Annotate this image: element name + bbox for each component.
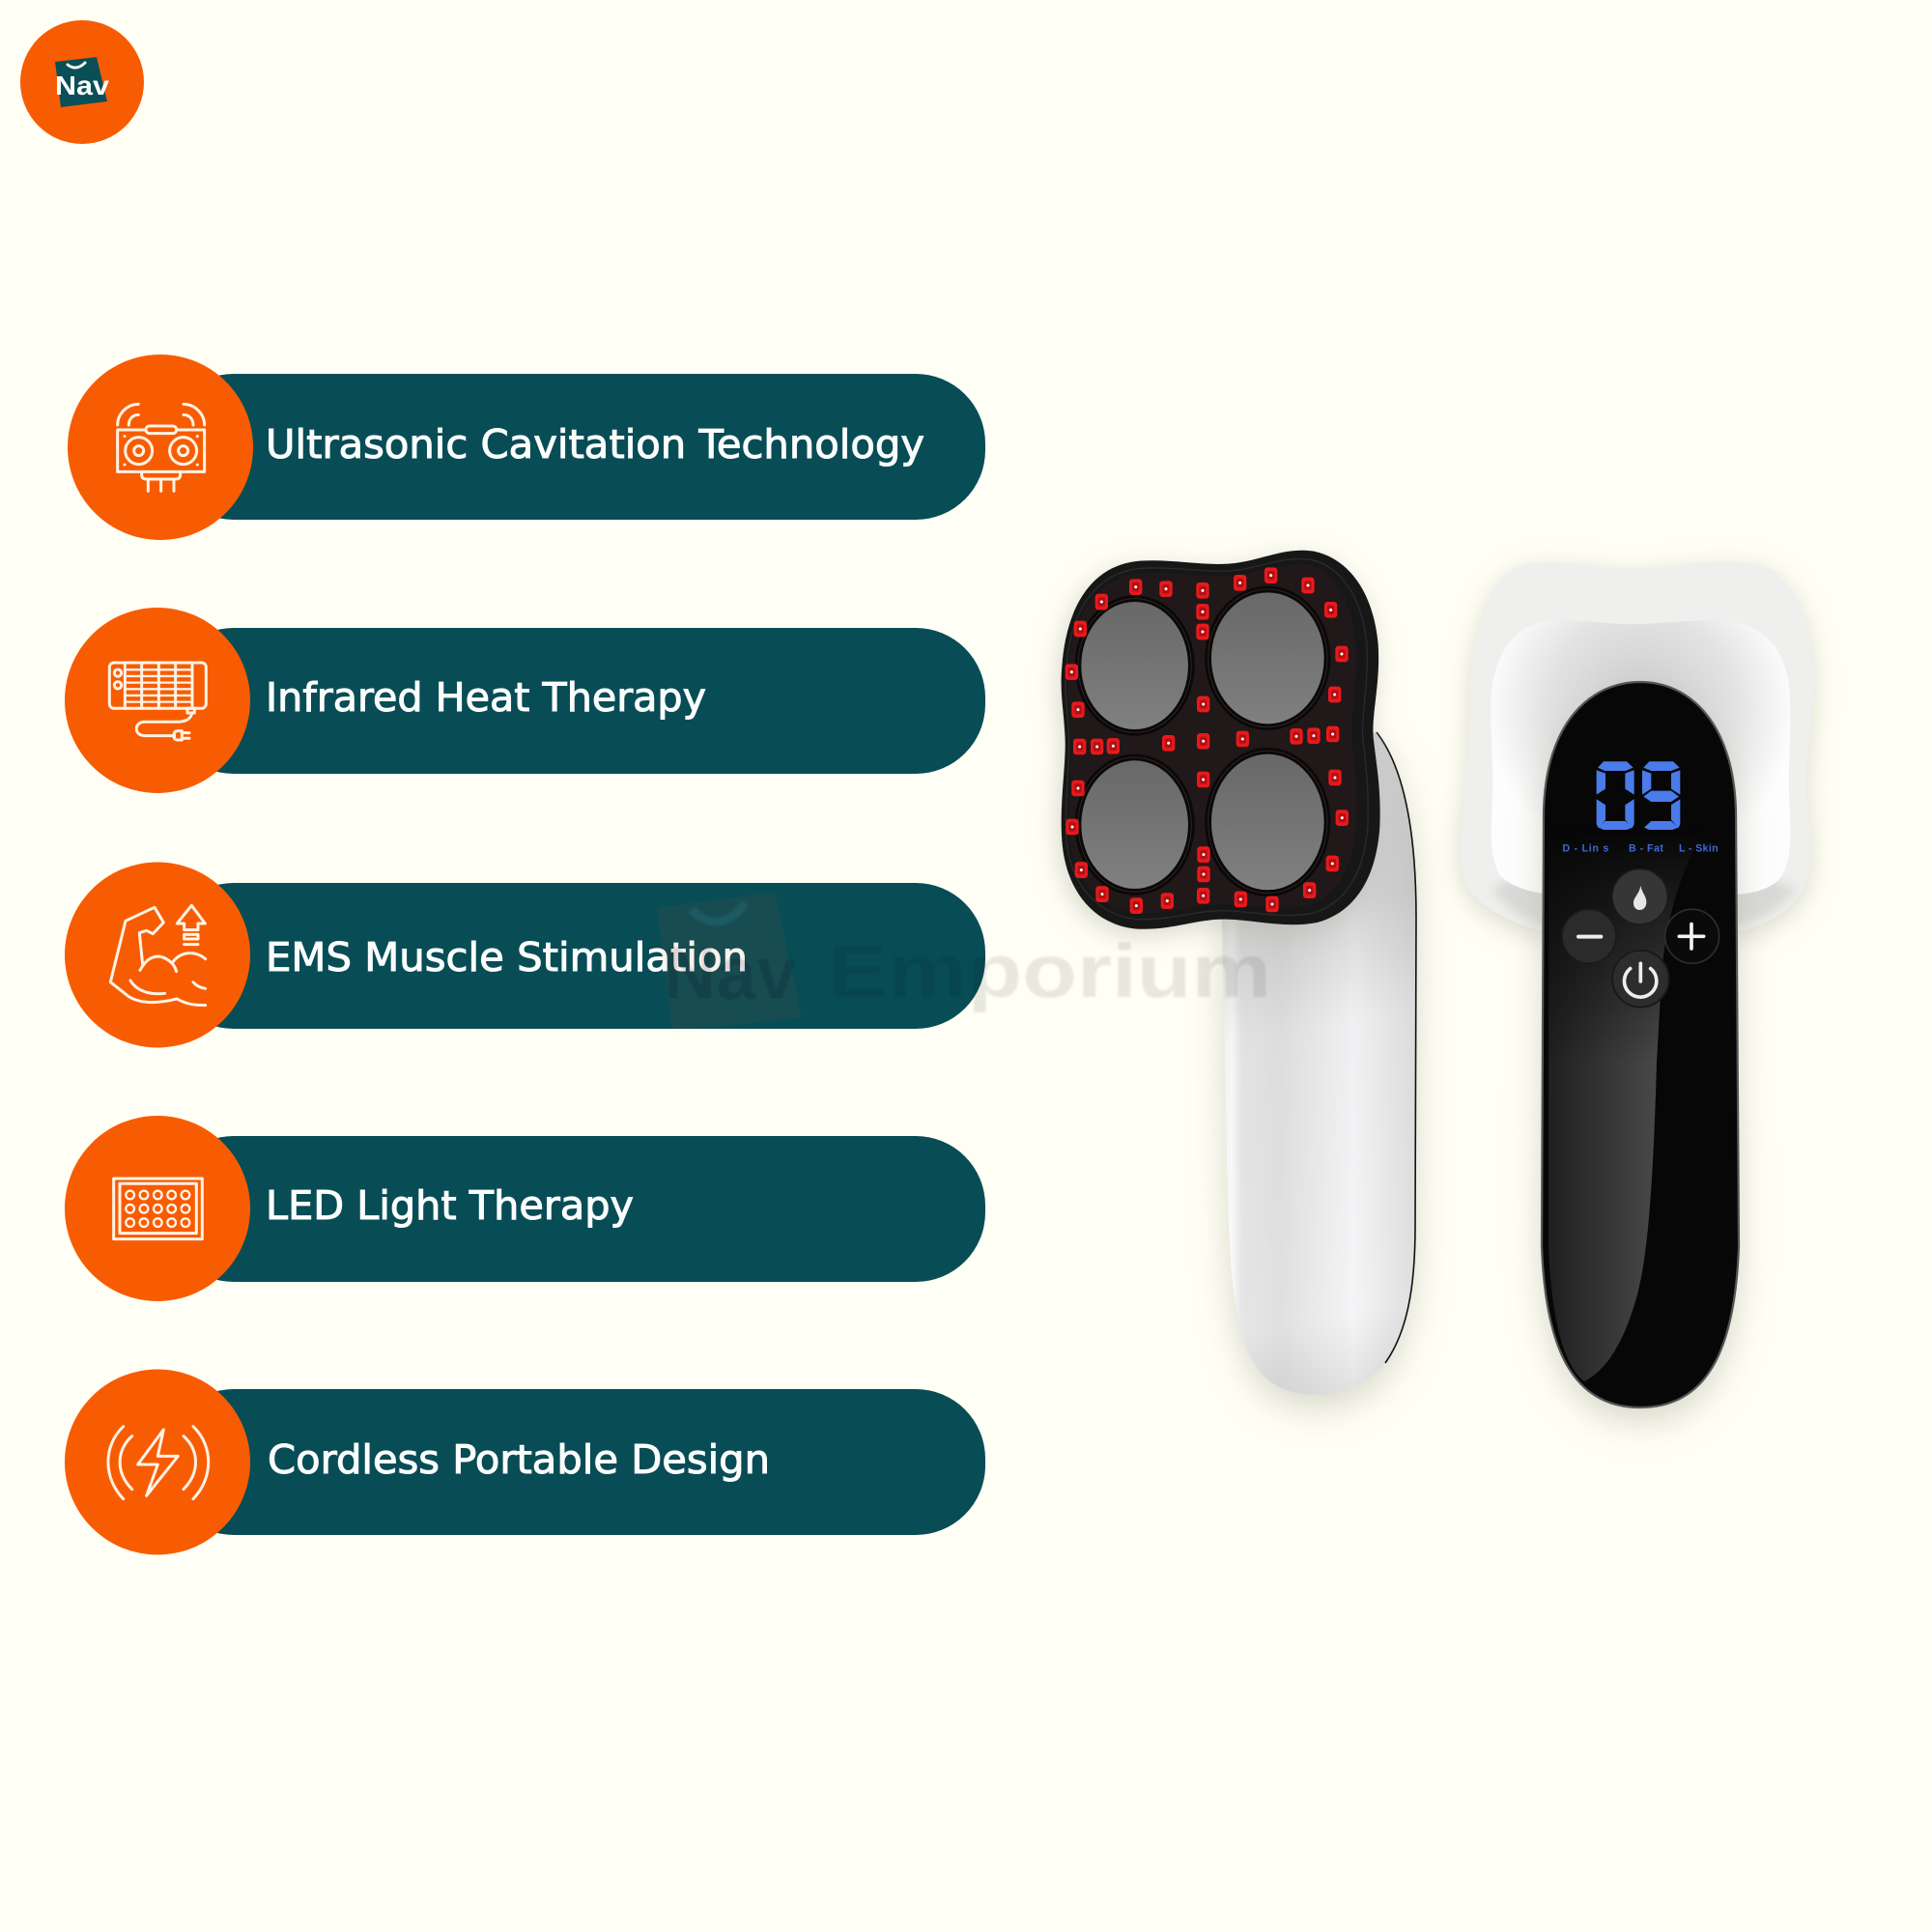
button: minus bbox=[1562, 909, 1616, 963]
icon: flexed arm with arrow bbox=[110, 905, 206, 1006]
display mode labels: D - Lin s bbox=[1562, 843, 1608, 855]
label: EMS Muscle Stimulation bbox=[266, 934, 748, 980]
label: Ultrasonic Cavitation Technology bbox=[266, 421, 924, 468]
display mode labels: L - Skin bbox=[1679, 843, 1719, 855]
button: power bbox=[1612, 951, 1669, 1008]
display mode labels: B - Fat bbox=[1629, 843, 1663, 855]
feature row: EMS muscle bbox=[65, 862, 985, 1047]
feature row: cordless bbox=[65, 1370, 985, 1555]
feature row: infrared heat bbox=[65, 608, 985, 793]
button: plus bbox=[1665, 909, 1719, 963]
handle: black glossy bbox=[1542, 682, 1739, 1421]
logo badge: Nav bbox=[55, 71, 109, 100]
watermark: Nav bbox=[664, 930, 798, 1015]
lens: bottom right bbox=[1205, 748, 1330, 896]
handle: white bbox=[1222, 732, 1416, 1408]
logo badge bbox=[20, 20, 144, 144]
lens: top left bbox=[1075, 595, 1195, 736]
display: 09 bbox=[1597, 761, 1680, 830]
label: Infrared Heat Therapy bbox=[266, 674, 706, 721]
button: flame bbox=[1612, 869, 1667, 924]
label: LED Light Therapy bbox=[266, 1182, 634, 1229]
label: Cordless Portable Design bbox=[268, 1436, 770, 1483]
head: white back bbox=[1460, 562, 1813, 939]
icon: LED panel bbox=[114, 1179, 202, 1239]
icon: ultrasonic sensor bbox=[118, 404, 205, 491]
device: front view with display bbox=[1460, 562, 1813, 1421]
feature row: LED light bbox=[65, 1116, 985, 1301]
display mode labels bbox=[1562, 843, 1719, 855]
red LED array bbox=[1065, 567, 1349, 914]
watermark: Emporium bbox=[828, 928, 1271, 1013]
feature row: ultrasonic cavitation bbox=[68, 355, 985, 540]
icon: lightning bolt with waves bbox=[108, 1427, 209, 1499]
icon: infrared heater bbox=[109, 663, 206, 740]
watermark bbox=[657, 892, 1271, 1032]
lens: bottom left bbox=[1075, 754, 1195, 895]
device: back view with red LEDs bbox=[1058, 551, 1416, 1408]
display and controls bbox=[1562, 761, 1719, 1008]
head: LED face bbox=[1058, 551, 1380, 935]
lens: top right bbox=[1205, 586, 1330, 730]
